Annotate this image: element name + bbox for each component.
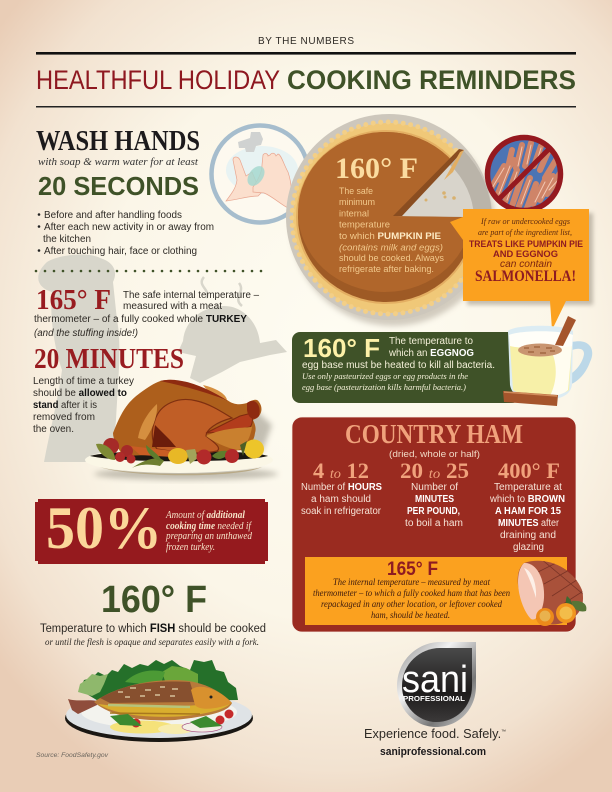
title [36,65,576,95]
bullet list: After touching hair, face or clothing [44,246,197,257]
text: standing time: removed from [33,412,95,423]
stat: soak hours [301,458,382,517]
stat: boil minutes: MINUTES [415,494,454,505]
text: additional cooking time: cooking time needed if [166,521,252,532]
illustration: pumpkin pie [286,114,495,326]
panel: wash hands [36,126,214,257]
stat: browning temperature: 400° F [498,458,560,483]
text: turkey temperature: thermometer – of a fully cooked whole TURKEY [34,314,247,325]
dotted divider [36,270,264,272]
text: standing time: stand after it is [33,400,97,411]
text: pie temperature: refrigerate after baking. [339,264,434,275]
stat: browning temperature: which to BROWN [489,494,565,505]
heading: country ham: COUNTRY HAM [345,419,523,449]
bullet list [38,210,214,257]
stat: soak hours: soak in refrigerator [301,506,382,517]
text: pie temperature: minimum [339,197,375,208]
stat: boil minutes: to boil a ham [405,518,463,529]
title: HEALTHFUL HOLIDAY [36,65,280,95]
stat: boil minutes: Number of [411,482,458,493]
text: additional cooking time: frozen turkey. [166,542,215,553]
badge background [35,499,268,564]
eggnog background [292,332,520,403]
section label: by the numbers: BY THE NUMBERS [258,36,354,47]
number: 50%: 50% [46,495,162,561]
icon: hand washing [212,126,308,222]
illustration: glazed ham [518,560,586,626]
bullet list: Before and after handling foods [44,210,182,221]
stat: browning temperature: A HAM FOR 15 [495,506,561,517]
bottom title rule [36,106,576,108]
stat: browning temperature: draining and [500,530,556,541]
callout: cooked ham temperature: The internal temperature – measured by meat [333,577,490,587]
callout: cooked ham temperature [305,557,567,625]
text: eggnog temperature: The temperature to [389,336,473,347]
stat: boil minutes: PER POUND, [407,506,460,517]
text: eggnog temperature: egg base (pasteurization kills harmful bacteria.) [302,382,466,392]
text: pie temperature: to which PUMPKIN PIE [339,231,441,242]
chef silhouette [38,255,287,462]
illustration: roast turkey [85,380,278,480]
text: fish temperature: Temperature to which FISH should be cooked [40,623,266,635]
bullet list: After each new activity in or away from [44,222,214,233]
callout: salmonella warning: SALMONELLA! [475,268,576,285]
logo: sani professional [364,642,506,758]
bullet list: the kitchen [43,234,91,245]
text: turkey temperature: The safe internal temperature – [123,290,259,301]
text: pie temperature: internal [339,208,369,220]
callout: salmonella warning: If raw or undercooked eggs [480,216,571,226]
text: eggnog temperature: which an EGGNOG [388,348,474,359]
callout: cooked ham temperature: ham, should be heated. [371,610,450,620]
tagline: Experience food. Safely. [364,726,504,741]
text: additional cooking time: Amount of additional [165,510,245,521]
logo: sani professional: sani [402,659,468,701]
website: saniprofessional.com [380,746,486,758]
title: COOKING REMINDERS [287,65,576,95]
panel: turkey temperature [33,285,259,435]
stat: browning temperature [489,458,565,553]
text: turkey temperature [34,290,259,339]
text: turkey temperature: (and the stuffing inside!) [34,328,138,339]
tagline: ™ [501,729,506,735]
subheading: with soap: with soap & warm water for at least [38,157,198,168]
number: 160 F: 160° F [101,579,207,621]
stat: soak hours: Number of HOURS [301,482,382,493]
panel: eggnog [292,332,520,403]
panel: country ham [292,417,590,632]
source note: Source: FoodSafety.gov [36,752,109,759]
text: eggnog temperature: Use only pasteurized eggs or egg products in the [302,371,468,381]
illustration: fish on plate [65,660,253,742]
icon: no salmonella [487,137,562,211]
number: 165 F: 165° F [36,285,111,316]
callout: salmonella warning: AND EGGNOG [493,249,558,260]
subheading: dried: (dried, whole or half) [389,449,480,460]
ham panel background [292,417,576,632]
callout: cooked ham temperature: thermometer – to which a fully cooked ham that has been [313,588,510,598]
stat: soak hours: 4 to 12 [313,458,369,483]
text: standing time: should be allowed to [33,388,127,399]
panel: fish temperature [40,579,266,648]
text: fish doneness: or until the flesh is opaque and separates easily with a fork. [45,637,259,648]
callout: cooked ham temperature: 165° F [387,559,438,580]
top rule [36,52,576,55]
callout: salmonella warning: are part of the ingredient list, [478,227,572,237]
illustration: eggnog mug [503,316,592,406]
text: pie temperature: should be cooked. Always [339,253,444,264]
text: pie temperature: (contains milk and eggs) [339,242,443,254]
text: standing time [33,376,134,435]
number: 20 minutes: 20 MINUTES [34,344,184,375]
text: additional cooking time [165,510,253,553]
number: eggnog 160 F: 160° F [303,333,380,363]
text: pie temperature: The safe [339,186,373,197]
text: standing time: the oven. [33,424,74,435]
callout: salmonella warning [450,209,593,330]
text: eggnog temperature [302,336,495,392]
text: additional cooking time: preparing an unthawed [165,531,253,542]
text: pie temperature [339,186,444,275]
heading: wash hands: WASH HANDS [36,126,200,157]
text: eggnog temperature: egg base must be heated to kill all bacteria. [302,360,495,371]
callout: cooked ham temperature: repackaged in any other location, or leftover cooked [321,599,502,609]
callout: salmonella warning: can contain [500,259,552,270]
callout: salmonella warning: TREATS LIKE PUMPKIN PIE [469,239,583,250]
logo mark [397,642,476,727]
heading: 20 seconds: 20 SECONDS [38,171,199,201]
stat: boil minutes [400,458,469,529]
text: turkey temperature: measured with a meat [123,301,222,312]
stat: browning temperature: glazing [513,542,544,553]
stat: browning temperature: Temperature at [494,482,562,493]
number: pie 160 F: 160° F [335,152,418,185]
panel: 50 percent [35,495,268,564]
logo: sani professional: PROFESSIONAL [403,694,465,703]
stat: boil minutes: 20 to 25 [400,458,469,483]
text: pie temperature: temperature [339,220,390,230]
stat: browning temperature: MINUTES after [498,518,560,529]
text: standing time: Length of time a turkey [33,376,134,387]
stat: soak hours: a ham should [311,494,371,505]
